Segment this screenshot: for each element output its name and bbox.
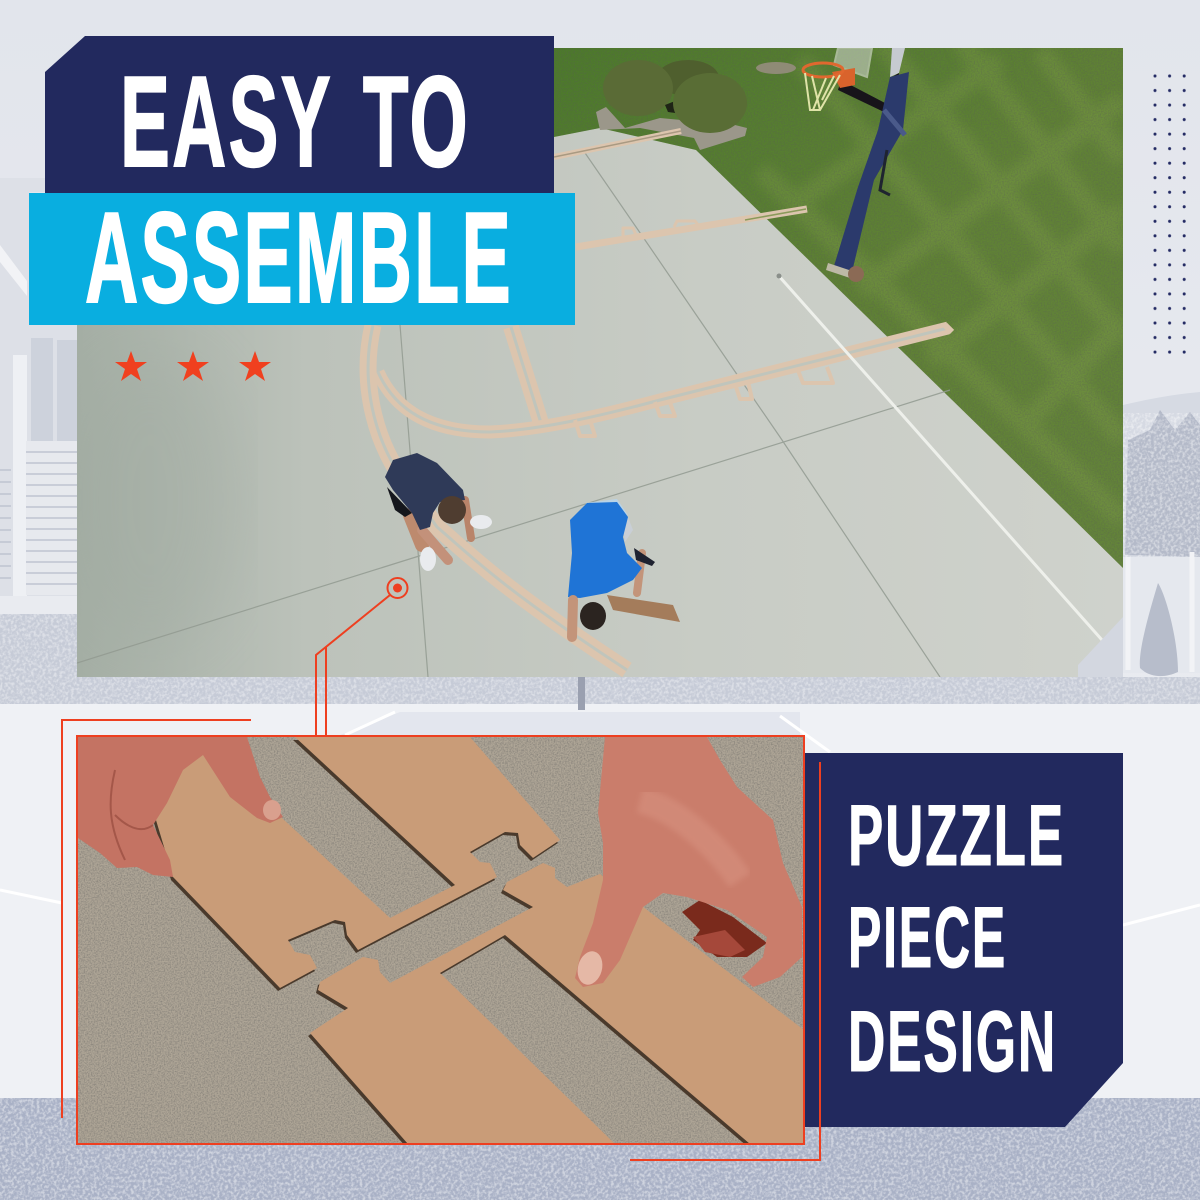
faded trees and fence bbox=[1123, 392, 1200, 676]
cardboard board held by blue shirt person bbox=[607, 595, 680, 622]
person in blue shirt bbox=[568, 499, 655, 637]
right hand bbox=[574, 737, 802, 988]
lower right photo corner cut bbox=[1078, 617, 1123, 677]
panel label line two: PIECE bbox=[848, 890, 1007, 986]
panel label line one: PUZZLE bbox=[848, 788, 1065, 884]
title panel: easy to bbox=[45, 36, 554, 194]
shrubs and mulch bed bbox=[596, 60, 747, 150]
panel label line three: DESIGN bbox=[848, 994, 1057, 1090]
title line two: ASSEMBLE bbox=[85, 186, 513, 330]
faded grass strips bbox=[0, 614, 1200, 1200]
dot grid decoration bbox=[1148, 69, 1192, 360]
person in dark shirt bbox=[385, 453, 492, 571]
far mulch ring bbox=[756, 62, 796, 74]
title line one: EASY TO bbox=[120, 50, 470, 194]
faded house bbox=[0, 178, 77, 616]
callout pointer linking photos bbox=[316, 578, 408, 736]
cardboard piece: lower bbox=[310, 863, 804, 1144]
red photo frame and corner brackets bbox=[62, 720, 820, 1160]
left hand bbox=[77, 737, 283, 877]
puzzle piece panel bbox=[805, 753, 1123, 1127]
puzzle piece photo bbox=[77, 737, 804, 1147]
three red stars bbox=[115, 351, 271, 381]
basketball hoop bbox=[803, 48, 909, 282]
main photo: driveway court bbox=[60, 40, 1123, 677]
sideline tape bbox=[778, 275, 1102, 640]
court tape lines bbox=[368, 131, 952, 670]
lawn bbox=[554, 40, 1123, 568]
title panel: assemble bbox=[29, 186, 575, 330]
cardboard piece: upper bbox=[150, 737, 560, 988]
cardboard piece: shadow edges bbox=[148, 740, 802, 1147]
concrete seams bbox=[77, 150, 950, 677]
